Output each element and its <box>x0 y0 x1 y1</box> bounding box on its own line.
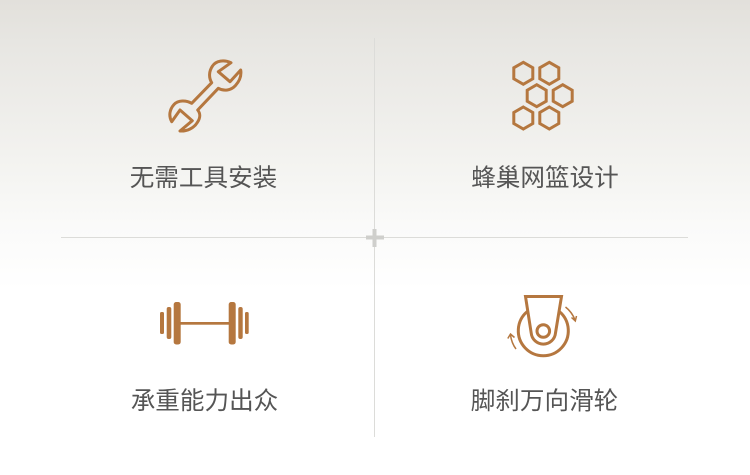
icon: caster wheel <box>508 296 576 356</box>
heading: load capacity: 承重能力出众 <box>131 388 278 415</box>
heading: swivel casters: 脚刹万向滑轮 <box>471 388 618 415</box>
icon: wrench <box>170 61 241 131</box>
icon: honeycomb <box>514 62 572 129</box>
heading: no tools install: 无需工具安装 <box>130 165 277 192</box>
icon: dumbbell <box>160 302 249 344</box>
heading: honeycomb basket: 蜂巢网篮设计 <box>471 165 619 192</box>
icon: center plus <box>366 229 384 247</box>
